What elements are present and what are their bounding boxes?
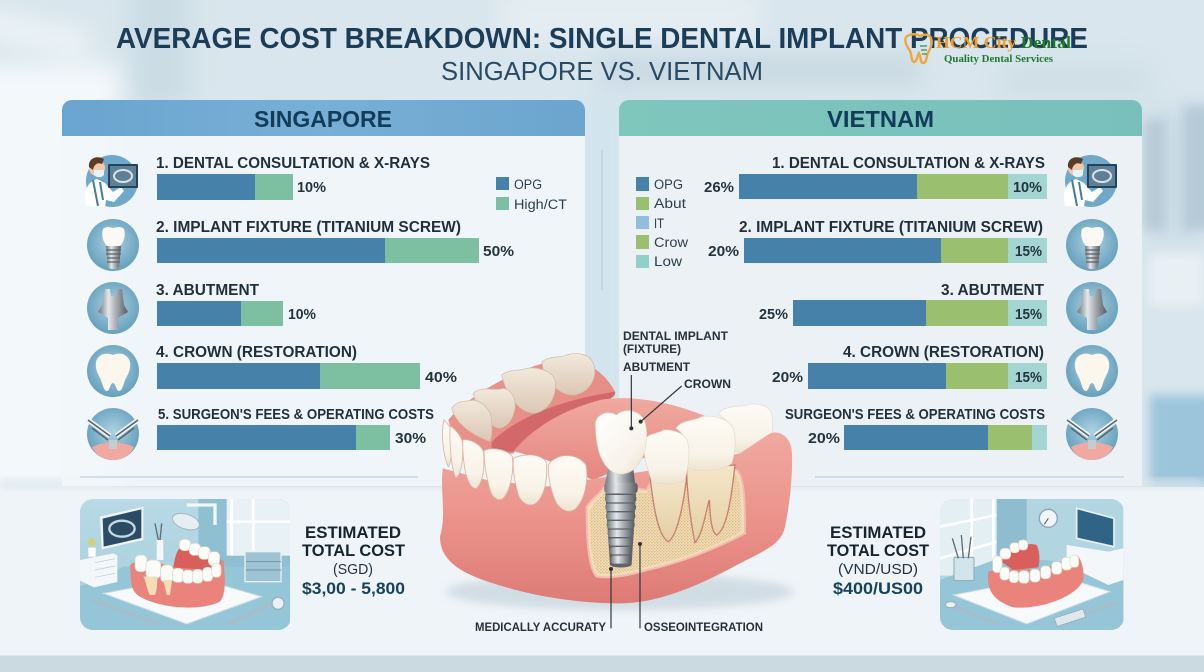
legend (Vietnam): [636, 177, 688, 269]
row: consultation (Vietnam): 10%: [1013, 179, 1042, 196]
Vietnam header: [619, 100, 1142, 136]
legend (Singapore): OPG: [514, 177, 542, 192]
front gum: [440, 432, 792, 603]
implant crown: [595, 411, 647, 474]
row: crown (Singapore): 40%: [425, 369, 457, 386]
row: surgeon's fees (Singapore): 30%: [395, 430, 426, 447]
legend (Vietnam): Low: [654, 254, 682, 269]
row: implant fixture (Vietnam): 20%: [708, 243, 739, 260]
row: implant fixture (Singapore): [156, 219, 514, 263]
row: implant fixture (Singapore): 2. IMPLANT FIXTURE (TITANIUM SCREW): [156, 219, 461, 236]
row: implant fixture (Vietnam): 2. IMPLANT FIXTURE (TITANIUM SCREW): [739, 219, 1043, 236]
row: abutment (Vietnam): 15%: [1015, 306, 1042, 323]
callouts: bottom: MEDICALLY ACCURATY: [475, 620, 606, 634]
Singapore header: [62, 100, 585, 136]
row: implant fixture (Vietnam): 15%: [1015, 243, 1042, 260]
row: abutment (Vietnam): 3. ABUTMENT: [941, 282, 1045, 299]
front teeth: [443, 420, 587, 511]
leader lines: [609, 375, 682, 628]
row: surgeon's fees (Vietnam): 20%: [808, 430, 840, 447]
legend (Vietnam): Crow: [654, 235, 688, 250]
row: abutment (Singapore): 3. ABUTMENT: [156, 282, 260, 299]
row: crown (Vietnam): 4. CROWN (RESTORATION): [843, 344, 1044, 361]
icon: surgical forceps on gum (Vietnam): [1066, 408, 1118, 460]
Singapore estimated total cost: (SGD): [333, 561, 373, 578]
icon: surgical forceps on gum (Singapore): [87, 408, 139, 460]
back teeth: [452, 353, 595, 442]
callouts: implant parts: ABUTMENT: [623, 360, 691, 374]
row: abutment (Singapore): [156, 282, 316, 326]
subtitle: SINGAPORE VS. VIETNAM: [441, 56, 763, 86]
Vietnam estimated total cost: [827, 524, 929, 598]
row: surgeon's fees (Singapore): 5. SURGEON'S FEES & OPERATING COSTS: [158, 406, 434, 423]
title: AVERAGE COST BREAKDOWN: SINGLE DENTAL IMPLANT PROCEDURE: [116, 23, 1088, 55]
legend (Vietnam): OPG: [654, 177, 683, 192]
row: consultation (Vietnam): [704, 155, 1047, 199]
Vietnam estimated total cost: TOTAL COST: [827, 542, 929, 560]
icon: doctor with x-ray (Vietnam): [1064, 155, 1117, 207]
callouts: implant parts: [623, 329, 731, 391]
Vietnam estimated total cost: ESTIMATED: [830, 524, 926, 542]
logo: HCM City Dental: [905, 33, 1071, 65]
logo: HCM City Dental: HCM City Dental: [936, 33, 1071, 52]
natural molars: [644, 416, 735, 484]
legend (Vietnam): Abut: [654, 196, 686, 211]
row: abutment (Vietnam): [759, 282, 1047, 326]
icon: crown (Singapore): [87, 345, 139, 397]
natural tooth roots: [650, 465, 735, 543]
legend (Singapore): [496, 177, 567, 212]
callouts: bottom: [475, 620, 763, 634]
card: Singapore clinic illustration: [80, 499, 290, 630]
icon: crown (Vietnam): [1066, 345, 1118, 397]
callouts: implant parts: (FIXTURE): [623, 342, 681, 356]
row: consultation (Vietnam): 1. DENTAL CONSULTATION & X-RAYS: [772, 155, 1045, 172]
callouts: bottom: OSSEOINTEGRATION: [644, 620, 763, 634]
legend (Vietnam): IT: [654, 216, 664, 231]
illustration: dental implant cross-section: [440, 353, 793, 628]
far molar: [718, 404, 773, 453]
Singapore estimated total cost: TOTAL COST: [302, 542, 405, 560]
row: crown (Vietnam): 15%: [1015, 369, 1042, 386]
row: crown (Vietnam): 20%: [772, 369, 803, 386]
panel: Vietnam: [619, 100, 1142, 486]
row: surgeon's fees (Vietnam): SURGEON'S FEES & OPERATING COSTS: [785, 406, 1045, 423]
Singapore estimated total cost: [302, 524, 405, 598]
shadow: [447, 573, 793, 610]
Vietnam heading: VIETNAM: [827, 106, 934, 132]
icon: abutment (Vietnam): [1066, 282, 1118, 334]
row: crown (Singapore): [156, 344, 457, 389]
row: abutment (Vietnam): 25%: [759, 306, 788, 323]
bone cross-section: [587, 470, 745, 577]
row: implant fixture (Singapore): 50%: [483, 243, 514, 260]
row: implant fixture (Vietnam): [708, 219, 1047, 263]
row: consultation (Vietnam): 26%: [704, 179, 734, 196]
icon: implant (Vietnam): [1066, 219, 1118, 271]
panel: Singapore: [62, 100, 585, 486]
row: abutment (Singapore): 10%: [288, 306, 316, 323]
icon: abutment (Singapore): [87, 282, 139, 334]
row: surgeon's fees (Singapore): [157, 406, 434, 450]
back gum: [448, 360, 615, 460]
row: crown (Singapore): 4. CROWN (RESTORATION): [156, 344, 357, 361]
row: consultation (Singapore): 10%: [297, 179, 326, 196]
Singapore estimated total cost: ESTIMATED: [305, 524, 401, 542]
icon: implant (Singapore): [87, 219, 139, 271]
legend (Singapore): High/CT: [514, 197, 567, 212]
row: surgeon's fees (Vietnam): [785, 406, 1047, 450]
tongue: [515, 398, 707, 480]
logo: HCM City Dental: Quality Dental Services: [944, 54, 1053, 65]
row: consultation (Singapore): 1. DENTAL CONSULTATION & X-RAYS: [156, 155, 430, 172]
Singapore heading: SINGAPORE: [254, 106, 392, 132]
card: Vietnam clinic illustration: [940, 499, 1123, 630]
implant screw: [604, 468, 638, 567]
Vietnam estimated total cost: (VND/USD): [838, 561, 918, 578]
row: crown (Vietnam): [772, 344, 1047, 389]
row: consultation (Singapore): [156, 155, 430, 200]
icon: doctor with x-ray (Singapore): [85, 155, 138, 207]
Singapore estimated total cost: $3,00 - 5,800: [302, 580, 405, 598]
callouts: implant parts: CROWN: [684, 377, 731, 391]
callouts: implant parts: DENTAL IMPLANT: [623, 329, 729, 343]
inner gum shading: [492, 392, 615, 452]
Vietnam estimated total cost: $400/US00: [833, 580, 923, 598]
